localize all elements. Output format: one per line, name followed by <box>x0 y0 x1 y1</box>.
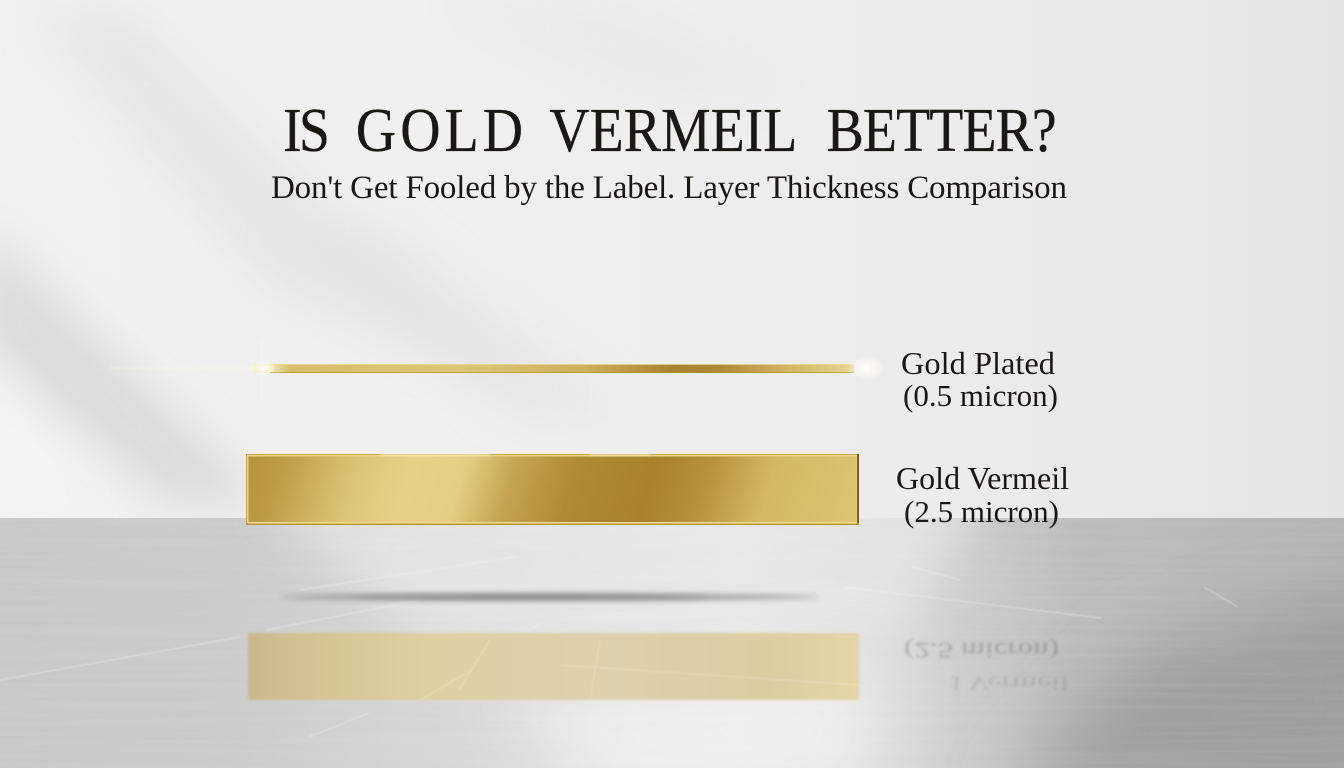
bar floor shadow <box>280 594 820 600</box>
title: IS <box>283 95 327 165</box>
title: GOLD <box>356 95 527 165</box>
title: VERMEIL <box>549 95 797 165</box>
label: gold vermeil: (2.5 micron) <box>904 494 1059 529</box>
label: gold vermeil <box>896 460 1069 529</box>
label: gold plated: Gold Plated <box>901 345 1055 381</box>
thick gold vermeil bar <box>246 454 859 525</box>
label: gold plated: (0.5 micron) <box>903 378 1058 413</box>
reflective floor <box>0 495 1344 768</box>
subtitle: Don't Get Fooled by the Label. Layer Thickness Comparison <box>271 170 1067 206</box>
background wall <box>0 0 1344 518</box>
bar reflection <box>248 633 859 700</box>
title: BETTER? <box>827 95 1056 165</box>
mirrored label reflection: (2.5 micron) <box>904 638 1059 663</box>
thin gold plated bar <box>110 340 886 402</box>
label: gold vermeil: Gold Vermeil <box>896 460 1069 496</box>
label: gold plated <box>901 345 1058 413</box>
mirrored label reflection <box>904 638 1066 690</box>
mirrored label reflection: Gold Vermeil <box>896 673 1069 694</box>
